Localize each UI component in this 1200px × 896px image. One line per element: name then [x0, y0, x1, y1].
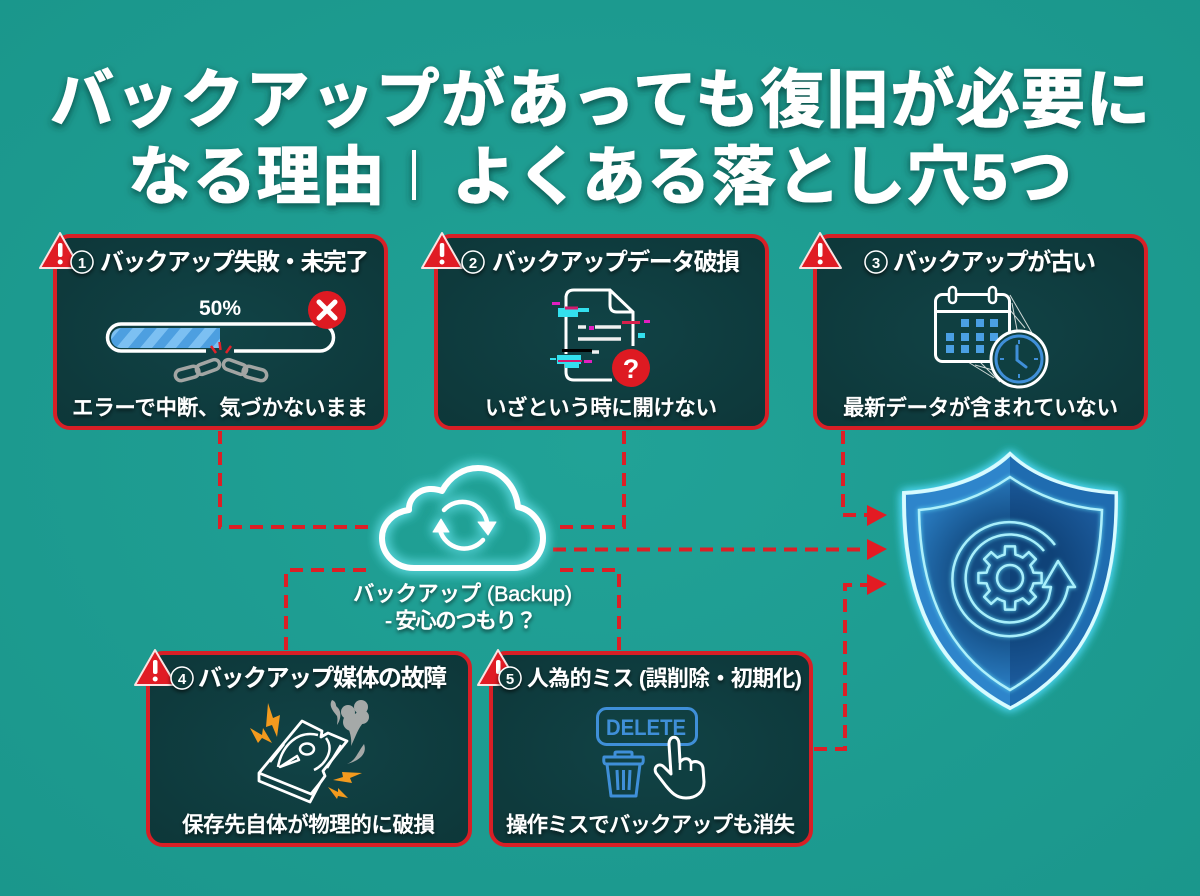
corrupted document icon [550, 290, 650, 387]
warning icon 2 [422, 233, 462, 268]
progress bar icon [108, 291, 346, 382]
calendar and clock icon [936, 287, 1047, 387]
heading 3: バックアップが古い [893, 248, 1096, 276]
caption 1: エラーで中断、気づかないまま [72, 396, 368, 420]
panel 2: corrupted data [422, 233, 767, 428]
recovery gear and arrow [952, 522, 1075, 636]
panel 1: backup failure [40, 233, 386, 428]
warning icon 4 [135, 650, 176, 685]
heading 4: 4 [178, 671, 187, 688]
heading 1: 1 [78, 255, 86, 272]
warning icon 5 [478, 650, 519, 685]
heading 2: 2 [469, 255, 477, 272]
heading 1: バックアップ失敗・未完了 [100, 249, 369, 276]
heading 5: 人為的ミス (誤削除・初期化) [527, 666, 802, 691]
title: バックアップがあっても復旧が必要に [50, 64, 1150, 136]
progress bar icon: 50% [199, 297, 241, 320]
panel 3: outdated backup [800, 233, 1146, 428]
delete button, trash and hand icon [598, 708, 704, 798]
caption 3: 最新データが含まれていない [843, 395, 1118, 420]
title [50, 64, 1150, 213]
caption 5: 操作ミスでバックアップも消失 [506, 813, 795, 837]
warning icon 1 [40, 233, 80, 268]
broken hard drive icon [250, 700, 369, 802]
heading 5: 5 [506, 671, 514, 688]
backup label: バックアップ (Backup) [353, 582, 572, 606]
panel 5: human error [478, 650, 811, 845]
heading 4: バックアップ媒体の故障 [198, 665, 447, 692]
backup label: - 安心のつもり？ [385, 609, 537, 633]
panel 4: media failure [135, 650, 470, 845]
dashed connectors [220, 431, 868, 749]
arrowheads [867, 505, 887, 595]
icon: recovery shield [904, 454, 1116, 708]
heading 3: 3 [872, 255, 880, 272]
caption 2: いざという時に開けない [485, 395, 717, 420]
delete button, trash and hand icon: DELETE [606, 715, 686, 740]
heading 2: バックアップデータ破損 [492, 248, 740, 276]
icon: cloud backup [382, 468, 543, 568]
title: なる理由 [128, 141, 385, 213]
backup label [353, 582, 572, 633]
caption 4: 保存先自体が物理的に破損 [182, 813, 435, 837]
warning icon 3 [800, 233, 841, 268]
title: よくある落とし穴5つ [452, 141, 1072, 213]
corrupted document icon: ? [623, 354, 639, 384]
